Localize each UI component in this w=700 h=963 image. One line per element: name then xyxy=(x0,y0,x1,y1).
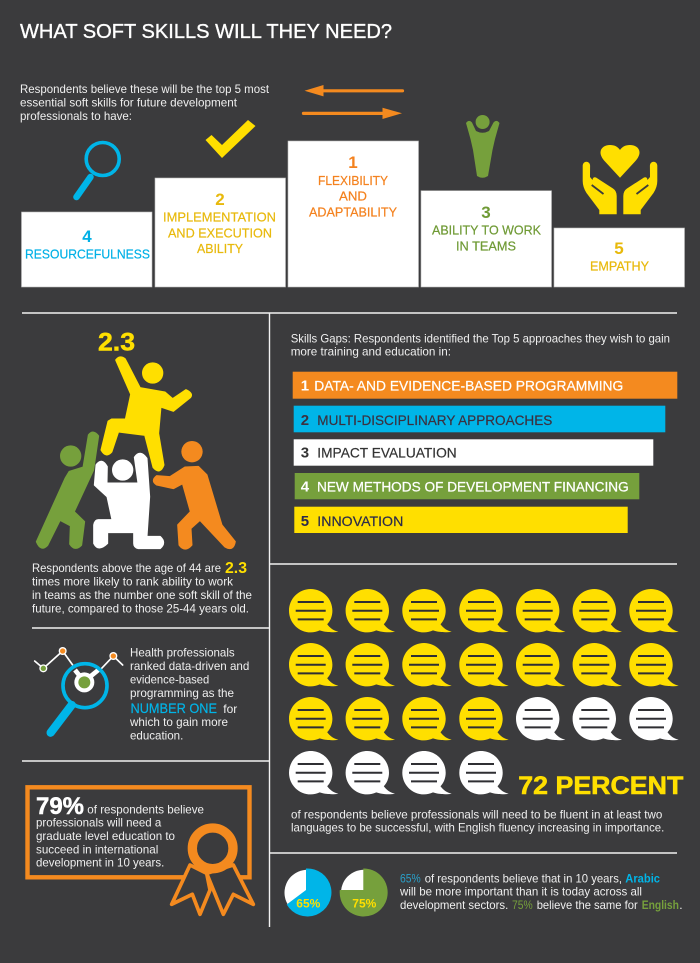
text: health professionals xyxy=(129,646,249,742)
certificate text xyxy=(36,802,204,870)
icon: magnifier over data chart xyxy=(35,647,123,733)
text: Arabic and English: 65% xyxy=(400,871,421,885)
step 2 implementation: AND EXECUTION xyxy=(168,226,272,240)
step 1 flexibility xyxy=(288,141,418,287)
text: Arabic and English: English xyxy=(642,898,679,912)
intro text: Respondents believe these will be the top 5 most xyxy=(20,82,270,96)
figure: orange person xyxy=(154,441,235,549)
bar 5: 5 xyxy=(301,513,309,530)
text: Arabic and English: of respondents believe that in 10 years, xyxy=(425,871,622,885)
step 2 implementation: ABILITY xyxy=(197,242,244,256)
bar 5: INNOVATION xyxy=(317,513,403,529)
icon: check mark xyxy=(206,120,256,158)
text: skills gaps intro: more training and education in: xyxy=(291,345,451,359)
text: languages: of respondents believe professionals will need to be fluent in at least two xyxy=(291,807,663,821)
step 4 resourcefulness: 4 xyxy=(82,227,92,246)
icon: heart and hands xyxy=(583,145,657,214)
title: WHAT SOFT SKILLS WILL THEY NEED? xyxy=(20,21,392,43)
pie chart: Arabic 65% xyxy=(284,868,331,916)
pie chart: Arabic 65%: 65% xyxy=(296,897,321,911)
bar 4: NEW METHODS OF DEVELOPMENT FINANCING xyxy=(317,479,629,495)
pie chart: English 75%: 75% xyxy=(352,897,377,911)
text: health professionals: which to gain more xyxy=(129,715,228,729)
bar 3: 3 xyxy=(301,445,309,462)
step 1 flexibility: AND xyxy=(339,190,367,204)
step 4 resourcefulness xyxy=(22,212,152,287)
pictogram: speech bubbles 72 percent xyxy=(289,589,679,794)
stat: 79%: 79% xyxy=(36,793,84,820)
bar 5 xyxy=(294,507,628,533)
panel: soft skills podium xyxy=(22,141,684,287)
step 2 implementation: IMPLEMENTATION xyxy=(163,210,276,224)
intro text xyxy=(20,82,270,123)
icon: people climbing xyxy=(37,357,235,549)
text: Arabic and English: believe the same for xyxy=(537,898,638,912)
step 5 empathy: EMPATHY xyxy=(590,260,650,274)
bar 4: 4 xyxy=(301,479,310,496)
certificate text: professionals will need a xyxy=(36,816,162,830)
step 1 flexibility: ADAPTABILITY xyxy=(309,206,398,220)
text: health professionals: for xyxy=(223,702,237,716)
text: Arabic and English: will be more important than it is today across all xyxy=(399,885,642,899)
bar 2: MULTI-DISCIPLINARY APPROACHES xyxy=(317,412,552,428)
text: languages xyxy=(291,807,664,835)
certificate text: development in 10 years. xyxy=(36,856,164,870)
bar 4 xyxy=(295,473,639,499)
text: age 44 statement xyxy=(32,560,252,615)
text: age 44 statement: in teams as the number one soft skill of the xyxy=(32,588,252,602)
text: age 44 statement: times more likely to rank ability to work xyxy=(32,575,234,589)
callout: 79 percent certificate xyxy=(28,787,253,914)
text: age 44 statement: 2.3 xyxy=(225,560,247,577)
bar 2 xyxy=(294,406,665,432)
text: skills gaps intro xyxy=(291,331,670,359)
text: health professionals: Health professionals xyxy=(130,646,235,660)
figure: yellow person xyxy=(101,357,191,471)
text: age 44 statement: future, compared to those 25-44 years old. xyxy=(32,601,249,615)
text: languages: languages to be successful, with English fluency increasing in importance. xyxy=(291,821,664,835)
intro text: professionals to have: xyxy=(20,109,132,123)
text: health professionals: ranked data-driven and xyxy=(130,659,249,673)
step 3 teams: IN TEAMS xyxy=(456,240,516,254)
text: Arabic and English: development sectors. xyxy=(400,898,508,912)
step 3 teams: ABILITY TO WORK xyxy=(432,224,542,238)
icon: person arms raised xyxy=(466,115,500,178)
step 2 implementation: 2 xyxy=(215,190,225,209)
icon: magnifier xyxy=(76,142,119,197)
bar 1: DATA- AND EVIDENCE-BASED PROGRAMMING xyxy=(314,378,623,394)
bar 1: 1 xyxy=(301,378,309,395)
text: health professionals: programming as the xyxy=(130,686,234,700)
icon: award ribbon xyxy=(172,828,253,914)
bar 3: IMPACT EVALUATION xyxy=(317,445,457,461)
text: health professionals: evidence-based xyxy=(130,672,209,686)
bar 3 xyxy=(294,439,653,466)
figure: white person xyxy=(94,454,163,548)
bar chart: top 5 approaches xyxy=(293,372,677,533)
step 2 implementation xyxy=(155,178,286,287)
arrows: flexibility xyxy=(302,85,404,119)
certificate text: of respondents believe xyxy=(87,802,204,816)
text: health professionals: NUMBER ONE xyxy=(130,700,217,716)
bar 1 xyxy=(293,372,677,399)
step 5 empathy xyxy=(554,228,684,287)
step 3 teams: 3 xyxy=(481,203,491,222)
pie chart: English 75% xyxy=(340,868,388,916)
text: Arabic and English: 75% xyxy=(512,898,533,912)
text: Arabic and English xyxy=(399,871,683,912)
step 5 empathy: 5 xyxy=(614,239,624,258)
step 1 flexibility: FLEXIBILITY xyxy=(318,174,389,188)
text: Arabic and English: Arabic xyxy=(625,871,660,885)
figure: green person xyxy=(37,432,98,548)
text: age 44 statement: Respondents above the age of 44 are xyxy=(32,561,221,575)
bar 2: 2 xyxy=(301,412,309,429)
certificate text: succeed in international xyxy=(36,842,158,856)
label: 2.3: 2.3 xyxy=(98,329,135,357)
certificate frame xyxy=(28,787,250,877)
intro text: essential soft skills for future development xyxy=(20,96,238,110)
step 1 flexibility: 1 xyxy=(348,153,358,172)
step 4 resourcefulness: RESOURCEFULNESS xyxy=(25,247,150,261)
text: skills gaps intro: Skills Gaps: Respondents identified the Top 5 approaches they wish to gain xyxy=(291,331,670,345)
stat: 72 percent: 72 PERCENT xyxy=(518,772,683,800)
text: Arabic and English: . xyxy=(679,898,683,912)
certificate text: graduate level education to xyxy=(36,829,175,843)
text: health professionals: education. xyxy=(130,728,183,742)
step 3 teams xyxy=(421,191,552,287)
